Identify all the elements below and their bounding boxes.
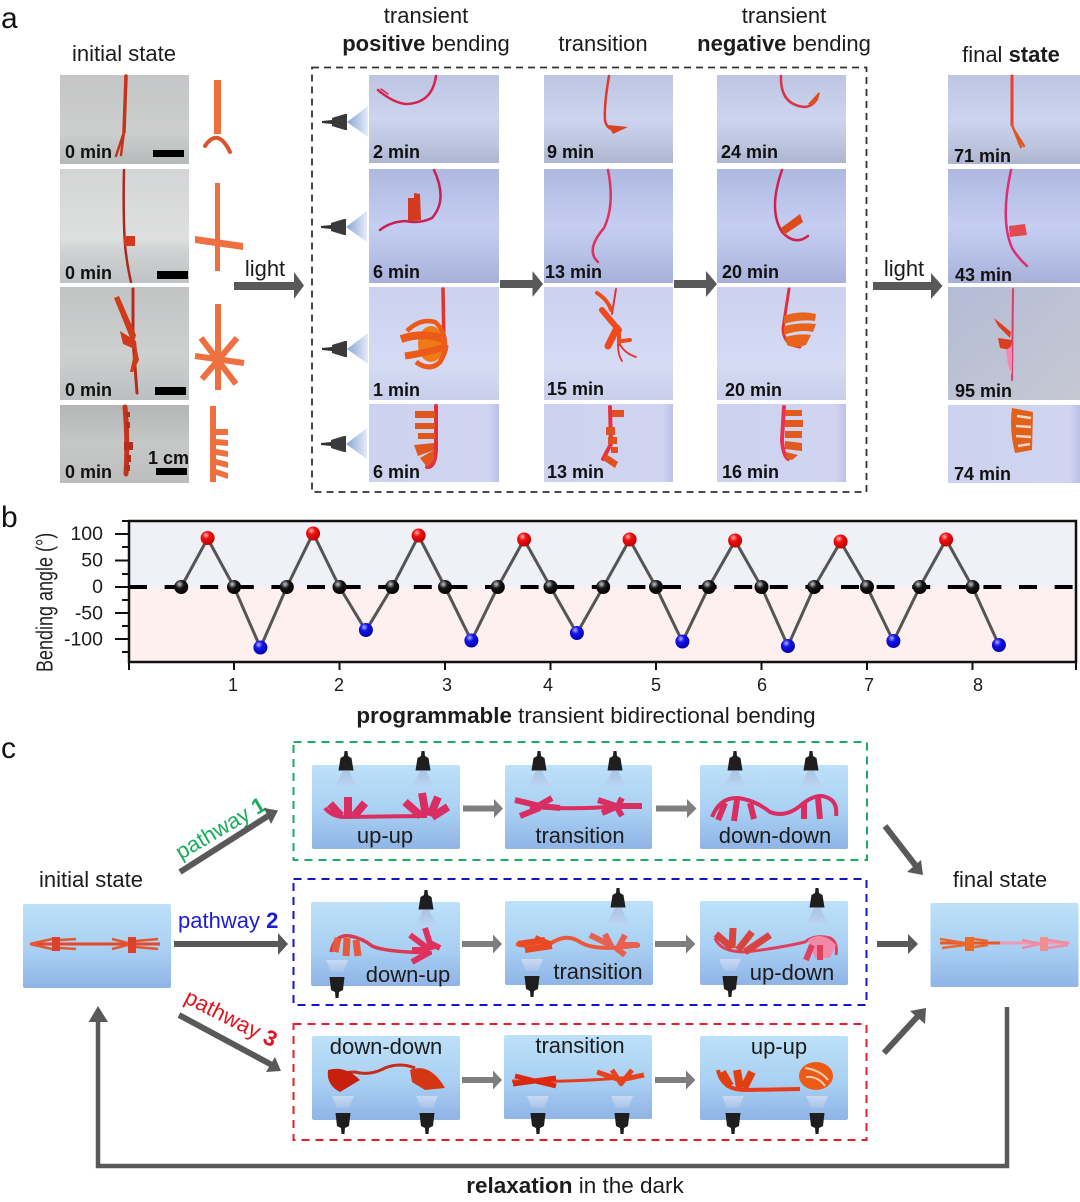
heading: transient positive bending: transient — [384, 3, 468, 28]
plot frame — [129, 521, 1076, 662]
tank: down-down — [312, 1034, 460, 1134]
x axis tick labels: 5 — [651, 675, 661, 695]
chart: bending angle over cycles — [33, 521, 1076, 695]
photo: 20 min — [717, 169, 846, 283]
photo: cross ribbon 0 min: 0 min — [65, 263, 112, 283]
column: initial state photos — [60, 75, 189, 483]
dashed box: pathway 1 — [294, 742, 867, 860]
tank: final state: final state — [953, 867, 1047, 892]
dashed box: pathway 2 — [294, 879, 866, 1005]
photo: 15 min — [544, 287, 673, 400]
heading: transition: transition — [558, 31, 648, 56]
arrow — [656, 799, 696, 818]
photo: 9 min — [544, 75, 673, 163]
y axis tick labels: 0 — [92, 576, 103, 598]
arrow: relaxation return loop — [88, 1006, 1007, 1166]
dashed box: illumination sequence — [312, 68, 866, 492]
photo: fork ribbon 0 min: 0 min — [65, 142, 112, 162]
column: transient positive bending photos — [369, 75, 499, 482]
photo: 6 min comb: 6 min — [373, 462, 420, 482]
photo: 20 min: 20 min — [722, 262, 779, 282]
photo: 43 min: 43 min — [955, 265, 1012, 285]
tank: transition: transition — [535, 823, 625, 848]
y axis tick labels: 50 — [81, 550, 103, 572]
tank: up-up: up-up — [751, 1034, 807, 1059]
photo: 95 min — [948, 287, 1080, 401]
tank: transition — [505, 888, 653, 997]
photo: 74 min: 74 min — [954, 464, 1011, 484]
arrow — [462, 1070, 502, 1090]
pathway 2 arrow and label — [174, 908, 288, 955]
arrow: light to transient bending: light — [245, 256, 285, 281]
tank: up-down: up-down — [750, 960, 834, 985]
tank: down-down — [700, 751, 848, 849]
photo: 74 min — [948, 405, 1080, 484]
tank: transition: transition — [535, 1033, 625, 1058]
photo: star ribbon 0 min — [60, 287, 189, 400]
light sources — [321, 106, 368, 459]
data line — [181, 533, 999, 648]
photo: 2 min — [369, 75, 499, 163]
photo: star ribbon 0 min: 0 min — [65, 380, 112, 400]
arrow: light to final state: light — [884, 256, 924, 281]
photo: 15 min: 15 min — [547, 379, 604, 399]
x axis tick labels: 3 — [442, 675, 452, 695]
tank: initial state: initial state — [39, 867, 143, 892]
heading: transient positive bending: positive bending — [342, 31, 510, 56]
tank: up-up — [700, 1034, 848, 1134]
x axis tick labels: 7 — [864, 675, 874, 695]
y axis title: Bending angle (°) — [33, 533, 58, 672]
pathway 1 arrow and label: pathway 1 — [171, 792, 270, 864]
y axis tick labels: -100 — [64, 628, 103, 650]
photo: 43 min — [948, 169, 1080, 285]
neutral points — [174, 580, 979, 594]
photo: 24 min: 24 min — [721, 142, 778, 162]
arrow — [463, 799, 503, 818]
heading: final state: final state — [962, 42, 1060, 67]
tank: transition — [504, 1033, 652, 1134]
column: schematic ribbon shapes — [195, 80, 244, 482]
zero reference line — [129, 585, 1076, 589]
arrow: pathway 2 to final — [877, 934, 918, 954]
photo: 6 min comb — [369, 404, 499, 482]
x axis title: programmable transient bidirectional bending — [356, 703, 816, 728]
heading: initial state: initial state — [72, 41, 176, 66]
icon: lamp row 2 — [321, 211, 367, 242]
photo: comb ribbon 0 min — [60, 405, 189, 483]
tank: up-up — [312, 751, 460, 849]
y axis tick labels — [64, 523, 103, 650]
heading: transient negative bending: negative bending — [697, 31, 871, 56]
arrow: light to final state — [873, 256, 942, 299]
caption: relaxation in the dark: relaxation in the dark — [466, 1173, 685, 1198]
tank: down-down: down-down — [719, 823, 831, 848]
photo: fork ribbon 0 min — [60, 75, 189, 164]
tank: transition — [505, 751, 652, 849]
photo: 2 min: 2 min — [373, 142, 420, 162]
tank: final state — [930, 867, 1078, 987]
tank: down-up: down-up — [366, 962, 450, 987]
pathway 3 arrow and label: pathway 3 — [181, 984, 281, 1052]
arrow — [655, 1070, 696, 1090]
tank: down-down: down-down — [330, 1034, 442, 1059]
plot background positive zone — [129, 521, 1076, 587]
negative bending points — [253, 623, 1006, 654]
photo: 16 min comb — [717, 404, 846, 482]
tank: down-up — [311, 890, 460, 998]
photo: 24 min — [717, 75, 846, 163]
schematic: cross — [195, 183, 243, 271]
arrow — [462, 934, 502, 954]
x axis tick labels: 4 — [543, 675, 553, 695]
photo: 13 min comb — [544, 404, 673, 482]
x axis tick labels: 6 — [757, 675, 767, 695]
icon: lamp row 1 — [322, 106, 368, 137]
arrow: transition to negative — [674, 271, 717, 297]
y axis tick labels: -50 — [75, 602, 103, 624]
tank: initial state — [23, 867, 171, 988]
dashed box: pathway 3 — [294, 1024, 866, 1140]
photo: 9 min: 9 min — [547, 142, 594, 162]
icon: lamp row 4 — [321, 428, 367, 459]
icon: lamp row 3 — [322, 333, 368, 364]
panel label c: c — [1, 732, 16, 765]
x axis tick labels — [228, 675, 983, 695]
photo: 20 min star: 20 min — [725, 380, 782, 400]
schematic: star — [195, 304, 244, 390]
tank: up-down — [700, 888, 848, 997]
photo: 20 min star — [717, 287, 846, 400]
tank: up-up: up-up — [357, 823, 413, 848]
axis ticks — [115, 521, 1076, 670]
arrow: pathway 3 to final — [884, 1008, 926, 1053]
photo: 6 min: 6 min — [373, 262, 420, 282]
pathway 2 arrow and label: pathway 2 — [178, 908, 278, 933]
photo: comb ribbon 0 min: 1 cm — [148, 448, 189, 468]
column: transient negative bending photos — [717, 75, 846, 482]
photo: 71 min: 71 min — [954, 146, 1011, 166]
column: transition photos — [544, 75, 673, 482]
photo: cross ribbon 0 min — [60, 169, 189, 283]
panel label b: b — [1, 501, 18, 534]
photo: 13 min: 13 min — [545, 262, 602, 282]
x axis tick labels: 1 — [228, 675, 238, 695]
x axis tick labels: 2 — [334, 675, 344, 695]
arrow: positive to transition — [500, 271, 543, 297]
photo: 1 min — [369, 287, 499, 400]
positive bending points — [201, 526, 953, 548]
photo: comb ribbon 0 min: 0 min — [65, 462, 112, 482]
arrow: pathway 1 to final — [885, 826, 923, 875]
panel label a: a — [1, 2, 18, 35]
x axis tick labels: 8 — [973, 675, 983, 695]
photo: 16 min comb: 16 min — [722, 462, 779, 482]
photo: 13 min comb: 13 min — [547, 462, 604, 482]
column: final state photos — [948, 75, 1080, 484]
schematic: comb — [210, 406, 228, 482]
arrow: light to transient bending — [234, 256, 304, 299]
photo: 6 min — [369, 169, 499, 283]
y axis tick labels: 100 — [70, 523, 103, 545]
heading: transient negative bending: transient — [742, 3, 826, 28]
schematic: fork — [205, 80, 230, 152]
tank: transition: transition — [553, 959, 643, 984]
photo: 95 min: 95 min — [955, 381, 1012, 401]
arrow — [655, 934, 696, 954]
photo: 71 min — [948, 75, 1080, 166]
photo: 13 min — [544, 169, 673, 283]
photo: 1 min: 1 min — [373, 380, 420, 400]
plot background negative zone — [129, 587, 1076, 662]
